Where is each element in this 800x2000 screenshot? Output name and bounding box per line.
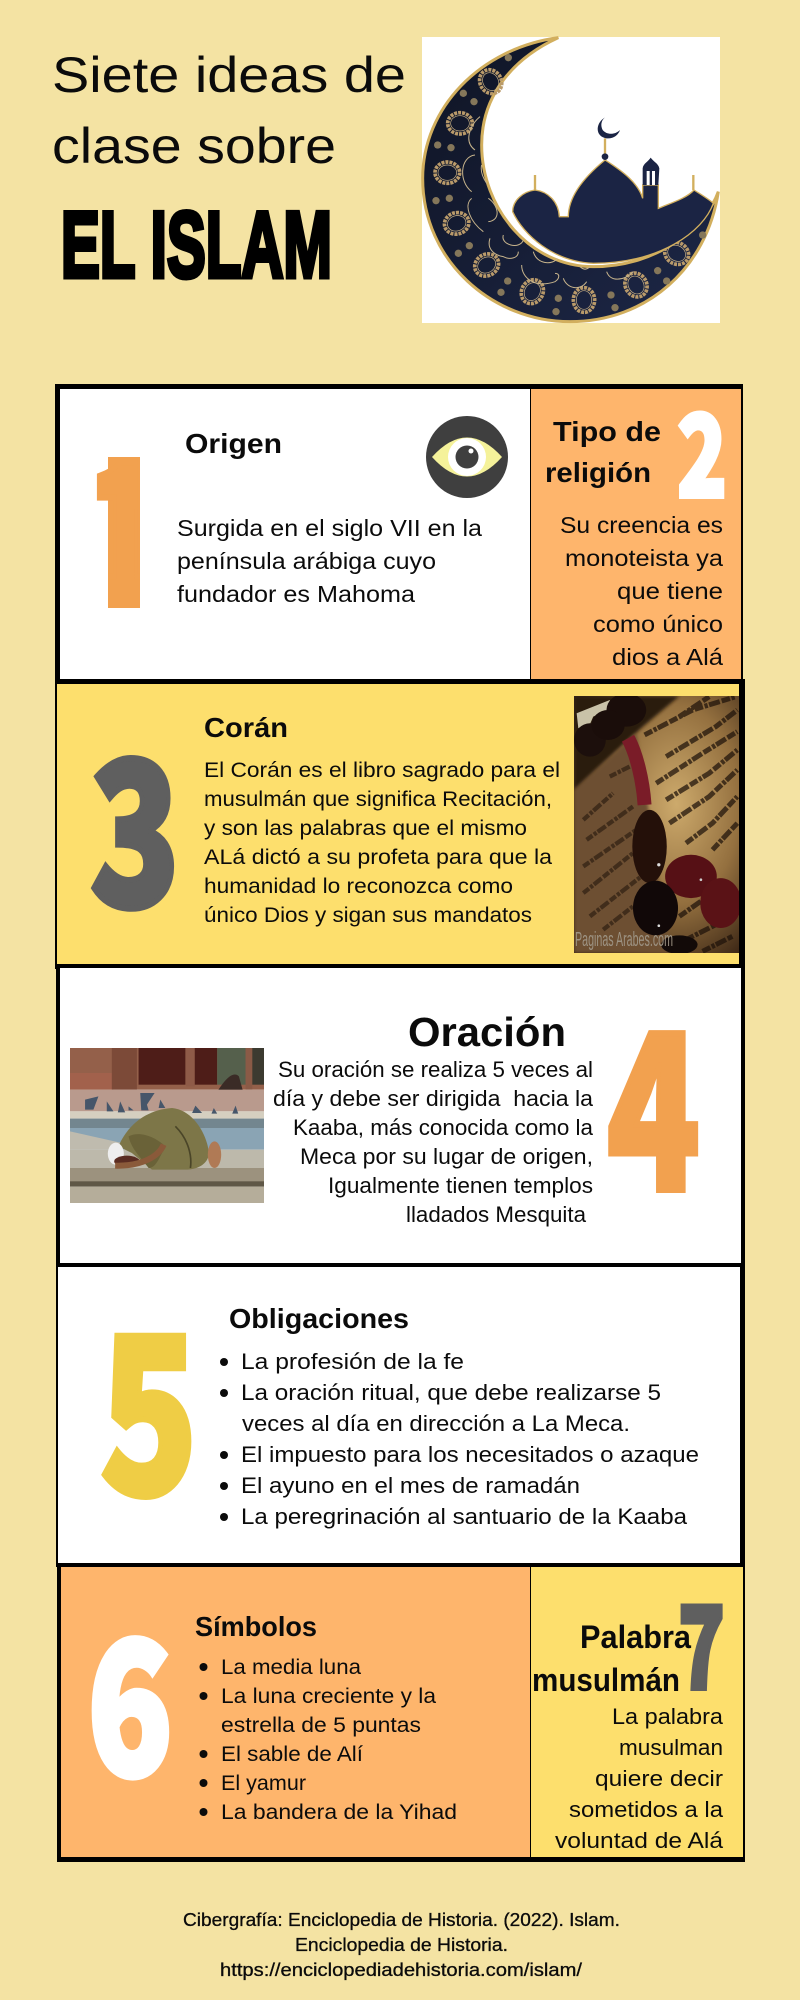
text: tipo de religion [560,512,723,670]
text: oracion: Igualmente tienen templos [328,1173,593,1198]
list: simbolos: La bandera de la Yihad [221,1801,457,1824]
image: man praying [70,1048,264,1203]
list: obligaciones: La oración ritual, que debe realizarse 5 [241,1380,661,1405]
title: Siete ideas de [52,47,406,103]
panel: coran [55,674,745,969]
text: palabra musulman: sometidos a la [569,1797,724,1822]
number 1 [96,457,140,608]
list: simbolos: La media luna [221,1656,361,1679]
heading: palabra musulman [532,1619,691,1698]
text: coran: musulmán que significa Recitación, [204,788,552,811]
text: tipo de religion: monoteista ya [565,545,723,571]
footer: cibergrafia: Cibergrafía: Enciclopedia de Historia. (2022). Islam. [183,1910,620,1930]
footer: cibergrafia: Enciclopedia de Historia. [295,1935,508,1955]
text: palabra musulman: La palabra [612,1704,724,1729]
panel: palabra musulman [531,1557,743,1857]
text: coran: único Dios y sigan sus mandatos [204,904,532,927]
heading: obligaciones: Obligaciones [229,1303,409,1334]
list: simbolos: El sable de Alí [221,1743,363,1766]
text: coran: humanidad lo reconozca como [204,875,513,898]
list: simbolos [200,1656,457,1824]
text: oracion: lladados Mesquita [406,1202,587,1227]
text: tipo de religion: Su creencia es [560,512,723,538]
heading: tipo de religion [545,416,661,488]
text: origen: fundador es Mahoma [177,581,415,607]
panel: origen [60,379,530,679]
panels 6 and 7 [57,1557,745,1862]
list: obligaciones: El impuesto para los necesitados o azaque [241,1442,699,1467]
heading: palabra musulman: musulmán [532,1662,680,1698]
text: coran: y son las palabras que el mismo [204,817,527,840]
footer: cibergrafia [183,1910,620,1980]
text: coran: ALá dictó a su profeta para que la [204,846,552,869]
text: oracion: Kaaba, más conocida como la [293,1115,594,1140]
text: palabra musulman: quiere decir [595,1766,723,1791]
heading: tipo de religion: Tipo de [553,416,661,447]
text: palabra musulman [555,1704,724,1853]
panel: tipo de religion [531,365,741,679]
text: origen: península arábiga cuyo [177,548,436,574]
title: clase sobre [52,118,336,174]
list: obligaciones: veces al día en dirección a La Meca. [242,1411,630,1436]
number 7: 7 [678,1557,725,1723]
number 2: 2 [677,365,727,530]
image: quran and prayer beads [574,693,741,954]
number 5: 5 [100,1241,198,1557]
text: origen [177,515,482,607]
list: obligaciones [220,1349,699,1529]
list: simbolos: estrella de 5 puntas [221,1714,421,1737]
icon: eye [426,416,508,498]
text: oracion: Meca por su lugar de origen, [300,1144,593,1169]
footer: cibergrafia: https://enciclopediadehistoria.com/islam/ [220,1960,582,1980]
panels 1 and 2 [55,365,743,681]
heading: coran: Corán [204,712,288,743]
text: oracion: Su oración se realiza 5 veces al [278,1057,593,1082]
list: obligaciones: La peregrinación al santuario de la Kaaba [241,1504,688,1529]
text: tipo de religion: que tiene [617,578,723,604]
list: simbolos: La luna creciente y la [221,1685,436,1708]
text: tipo de religion: como único [593,611,723,637]
heading: simbolos: Símbolos [195,1611,317,1642]
list: simbolos: El yamur [221,1772,306,1795]
list: obligaciones: La profesión de la fe [241,1349,464,1374]
panel: simbolos [61,1561,530,1857]
title [52,47,406,297]
text: coran: El Corán es el libro sagrado para el [204,759,560,782]
number 1: 1 [87,379,159,662]
heading: origen: Origen [185,428,282,459]
number 4: 4 [607,940,700,1253]
heading: tipo de religion: religión [545,457,651,488]
panel: obligaciones [56,1241,745,1567]
panel: oracion [56,940,745,1267]
text: oracion [273,1057,594,1227]
text: palabra musulman: voluntad de Alá [555,1828,724,1853]
image: quran and prayer beads: Paginas Arabes.com [575,929,673,951]
title: EL ISLAM [61,192,332,297]
icon: crescent moon and mosque [422,37,720,323]
heading: palabra musulman: Palabra [580,1619,691,1655]
text: coran [204,759,560,927]
text: palabra musulman: musulman [619,1735,723,1760]
heading: oracion: Oración [408,1009,566,1055]
text: oracion: día y debe ser dirigida hacia la [273,1086,594,1111]
text: tipo de religion: dios a Alá [612,644,723,670]
text: origen: Surgida en el siglo VII en la [177,515,482,541]
number 3: 3 [90,674,180,964]
number 6: 6 [88,1561,172,1829]
list: obligaciones: El ayuno en el mes de ramadán [241,1473,580,1498]
